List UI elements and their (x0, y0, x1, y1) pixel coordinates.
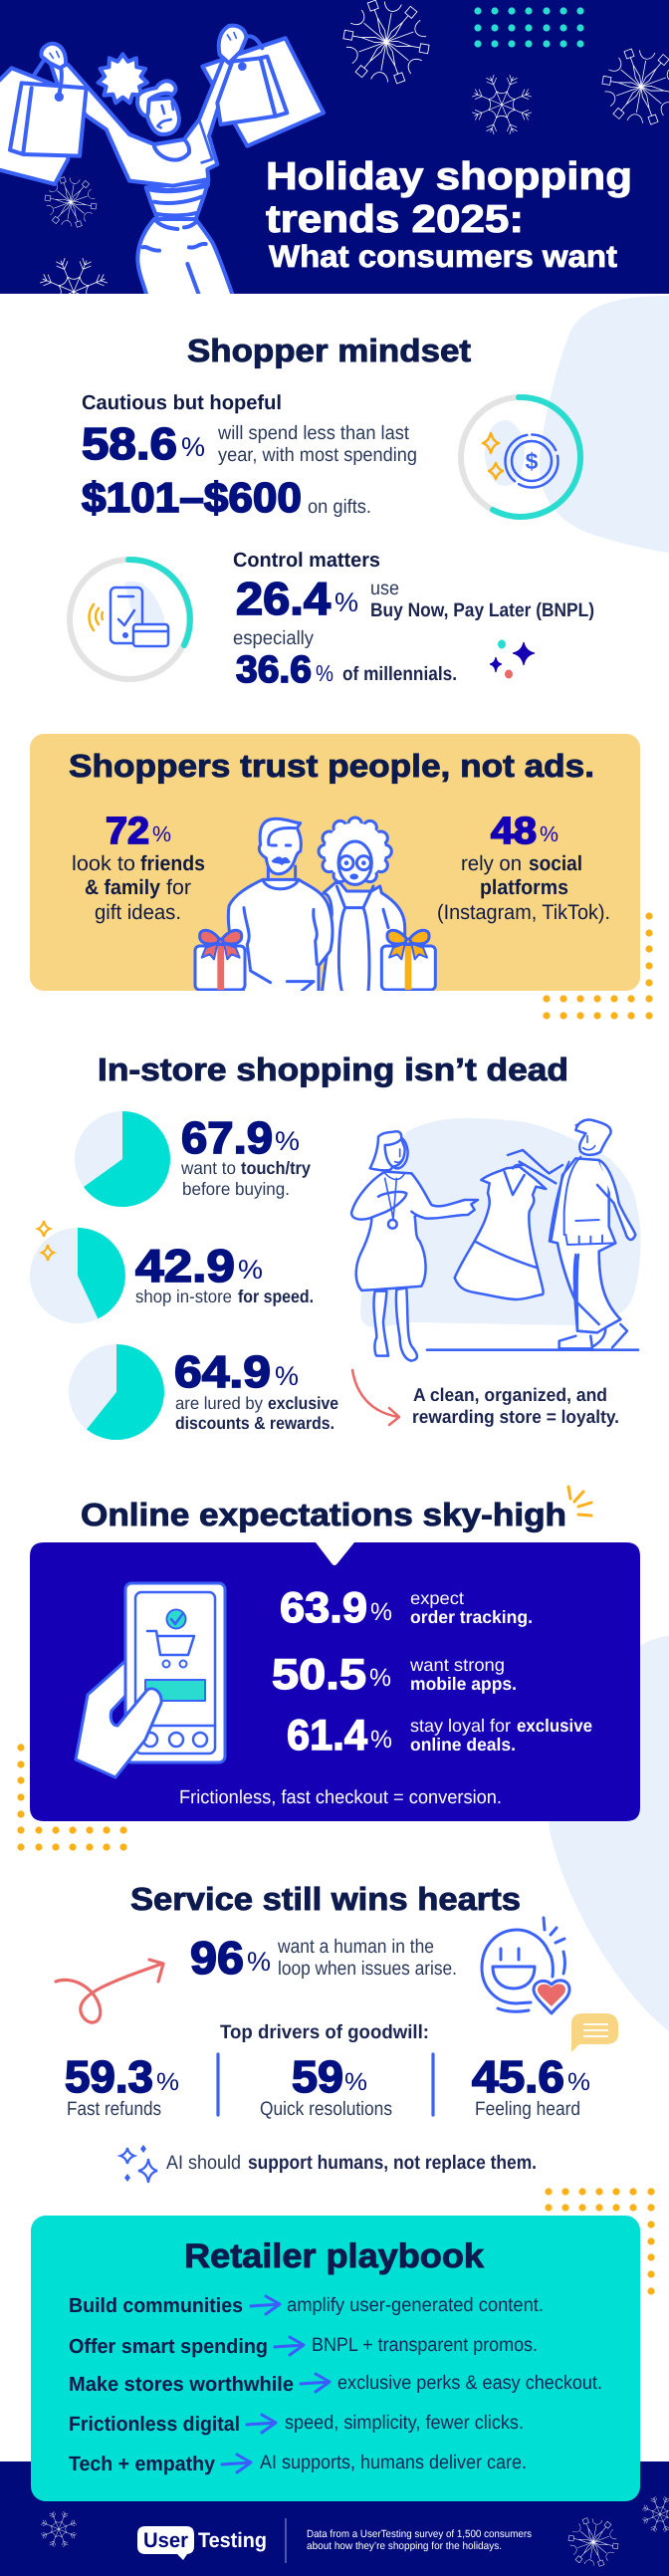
stat: 64.9: are lured by (175, 1393, 263, 1413)
snowflake (642, 2496, 669, 2532)
stat: 50.5 (272, 1651, 517, 1699)
stat: 42.9: for speed. (238, 1287, 314, 1306)
stat description: Buy Now, Pay Later (BNPL) (370, 599, 594, 621)
stat: 61.4: 61.4 (287, 1712, 367, 1759)
dot grid (474, 7, 584, 48)
snowflake (470, 73, 534, 136)
subheading: Top drivers of goodwill: (220, 2021, 429, 2043)
dot pattern: orange corner (543, 912, 653, 1020)
illustration: couple with gifts (195, 818, 435, 993)
stat: 96 percent: % (247, 1947, 271, 1977)
pie chart: 67.9 (75, 1111, 170, 1207)
stat: 72 percent (72, 811, 205, 924)
stat: 96 percent: loop when issues arise. (278, 1958, 457, 1980)
stat: 72 percent: friends (140, 852, 205, 875)
stat: 64.9: discounts & rewards. (175, 1413, 334, 1433)
callout text: rewarding store = loyalty. (412, 1406, 619, 1427)
row: tech plus empathy: AI supports, humans deliver care. (260, 2452, 527, 2473)
stat: fast refunds: % (156, 2068, 179, 2096)
stat: 36.6: 36.6 (236, 649, 312, 691)
ring chart with coin icon (461, 397, 580, 517)
stat: 61.4: % (370, 1726, 392, 1754)
stat: 42.9: shop in-store (135, 1287, 232, 1306)
dot pattern: orange left (17, 1744, 127, 1851)
stat: 63.9: expect (410, 1588, 464, 1608)
stat: 26.4: % (334, 587, 358, 617)
stat: 48 percent: (Instagram, TikTok). (437, 901, 610, 924)
heading: Service still wins hearts (130, 1881, 521, 1917)
source note: Data from a UserTesting survey of 1,500 consumers (307, 2528, 532, 2540)
stat: 26.4: 26.4 (236, 573, 331, 624)
stat: 64.9: 64.9 (174, 1346, 271, 1397)
stat: 61.4 (287, 1712, 592, 1759)
icon: sun rays (568, 1487, 591, 1516)
callout text: A clean, organized, and (413, 1384, 607, 1405)
stat: 63.9 (280, 1584, 533, 1632)
stat: 67.9: touch/try (241, 1158, 311, 1178)
stat: 36.6: of millennials. (342, 663, 457, 685)
stat: 72 percent: & family (85, 876, 160, 899)
stat: 63.9: 63.9 (280, 1584, 367, 1632)
icon: sparkle decoration (490, 639, 535, 679)
stat: 58.6: % (181, 432, 205, 462)
row: build communities: Build communities (69, 2294, 243, 2317)
icon: speech bubble (571, 2013, 618, 2052)
stat: 36.6: % (316, 660, 334, 686)
stat: quick resolutions (260, 2051, 392, 2120)
stat: feeling heard: Feeling heard (475, 2098, 580, 2120)
stat: 50.5: 50.5 (272, 1651, 366, 1699)
row: frictionless digital (69, 2412, 524, 2436)
title: Holiday shopping (266, 155, 632, 198)
stat: 96 percent: want a human in the (277, 1936, 434, 1958)
subheading: Cautious but hopeful (82, 391, 282, 414)
row: build communities: amplify user-generated content. (287, 2294, 544, 2316)
stat: spending range: $101–$600 (82, 474, 302, 521)
stat: 50.5: want strong (409, 1655, 505, 1675)
subheading: Control matters (233, 549, 380, 572)
title: trends 2025: (266, 198, 524, 241)
callout text: AI should (166, 2152, 241, 2174)
icon: sparkles (38, 1221, 54, 1261)
section: service still wins hearts (56, 1881, 618, 2183)
snowflake (343, 0, 429, 84)
stat: 96 percent: 96 (190, 1932, 244, 1984)
stat: 48 percent: social (529, 852, 582, 875)
stat: 42.9 (135, 1240, 314, 1306)
footer banner (0, 2461, 669, 2576)
stat: 50.5: % (369, 1664, 391, 1692)
logo (137, 2526, 267, 2560)
stat: 67.9: want to (180, 1158, 236, 1178)
icon: blue sparkles (120, 2145, 157, 2183)
stat: 72 percent: % (152, 821, 171, 846)
heading: Shopper mindset (187, 333, 471, 368)
stat: 67.9: before buying. (182, 1179, 290, 1199)
stat: 67.9: 67.9 (181, 1112, 273, 1163)
stat: 42.9: 42.9 (135, 1240, 235, 1291)
row: make stores worthwhile (69, 2372, 602, 2396)
row: offer smart spending: BNPL + transparent promos. (312, 2334, 538, 2356)
heading: Shoppers trust people, not ads. (69, 748, 594, 784)
heading: In-store shopping isn’t dead (98, 1052, 568, 1087)
illustration: woman with shopping bags (0, 26, 324, 299)
panel: shoppers trust people (30, 734, 640, 993)
stat: 36.6 (236, 649, 457, 691)
stat: 63.9: order tracking. (410, 1607, 533, 1627)
stat description (217, 422, 417, 466)
pie chart: 42.9 (30, 1228, 125, 1323)
section: in-store shopping (30, 1052, 641, 1440)
row: build communities (69, 2294, 544, 2317)
stat: 72 percent: look to (72, 852, 135, 875)
row: frictionless digital: speed, simplicity, fewer clicks. (285, 2412, 524, 2434)
row: tech plus empathy (69, 2452, 527, 2475)
source note (307, 2528, 532, 2552)
header banner (0, 0, 669, 294)
logo: User (143, 2529, 188, 2552)
row: make stores worthwhile: Make stores worthwhile (69, 2373, 294, 2396)
stat: feeling heard: 45.6 (472, 2051, 564, 2102)
ring chart with phone icon (70, 560, 190, 679)
row: offer smart spending (69, 2334, 538, 2358)
stat: 48 percent (437, 811, 610, 924)
arrow: red curved (352, 1370, 399, 1425)
panel: online stats (30, 1542, 640, 1821)
stat: 64.9: % (275, 1361, 299, 1391)
stat: 96 percent (190, 1932, 457, 1984)
stat: feeling heard: % (567, 2068, 590, 2096)
stat: quick resolutions: Quick resolutions (260, 2098, 392, 2120)
stat: 61.4: exclusive (517, 1716, 592, 1736)
logo: Testing (198, 2529, 267, 2552)
stat: 48 percent: platforms (480, 876, 568, 899)
row: offer smart spending: Offer smart spending (69, 2335, 268, 2358)
stat: 61.4: stay loyal for (410, 1716, 511, 1736)
callout text: support humans, not replace them. (248, 2152, 537, 2174)
snowflake (40, 2510, 78, 2548)
illustration: phone in hand (76, 1583, 225, 1777)
source note: about how they’re shopping for the holidays. (307, 2540, 502, 2552)
stat: 61.4: online deals. (410, 1735, 516, 1755)
ring chart with coin icon: $ (526, 448, 539, 474)
stat: 50.5: mobile apps. (410, 1674, 517, 1694)
background blob: upper right (540, 296, 669, 553)
snowflake (602, 49, 669, 124)
heading: Online expectations sky-high (81, 1497, 566, 1532)
stat description: year, with most spending (218, 444, 417, 466)
stat: 48 percent: % (540, 821, 558, 846)
row: frictionless digital: Frictionless digital (69, 2413, 240, 2436)
stat: feeling heard (472, 2051, 590, 2120)
stat: 72 percent: for (166, 876, 191, 899)
snowflake (45, 177, 97, 227)
stat: 72 percent: 72 (106, 811, 149, 852)
title (266, 155, 632, 274)
row: make stores worthwhile: exclusive perks & easy checkout. (337, 2372, 602, 2394)
section: online expectations (30, 1487, 640, 1821)
stat: 67.9: % (275, 1126, 300, 1156)
stat: fast refunds: 59.3 (65, 2051, 153, 2102)
stat: 67.9 (180, 1112, 311, 1199)
panel: retailer playbook (31, 2216, 640, 2501)
stat: 42.9: % (238, 1255, 263, 1285)
stat: 48 percent: 48 (491, 811, 537, 852)
stat: 64.9: exclusive (268, 1393, 338, 1413)
illustration: shoppers and dress (351, 1118, 641, 1361)
stat description: will spend less than last (217, 422, 410, 444)
callout text (412, 1384, 619, 1427)
stat: 58.6: 58.6 (82, 418, 177, 469)
stat: quick resolutions: 59 (292, 2051, 343, 2102)
stat description: use (370, 578, 399, 599)
background blob: lower right (549, 1636, 669, 2031)
snowflake clipped (40, 258, 108, 294)
stat: 72 percent: gift ideas. (95, 901, 181, 924)
dot pattern: orange upper right of playbook (545, 2188, 655, 2295)
section: shopper mindset (70, 333, 594, 691)
stat: 48 percent: rely on (461, 852, 522, 875)
stat description (233, 578, 594, 649)
row: tech plus empathy: Tech + empathy (69, 2453, 216, 2475)
title: What consumers want (269, 239, 617, 274)
heading: Retailer playbook (184, 2237, 484, 2275)
stat: 63.9: % (370, 1598, 392, 1626)
snowflake (568, 2518, 618, 2566)
caption: Frictionless, fast checkout = conversion. (179, 1787, 502, 1808)
icon: smiley with heart (482, 1918, 569, 2013)
pie chart: 64.9 (69, 1344, 164, 1440)
arrow: red loop (56, 1960, 163, 2022)
stat: spending range: on gifts. (308, 496, 371, 518)
stat: fast refunds: Fast refunds (67, 2098, 161, 2120)
stat: quick resolutions: % (344, 2068, 367, 2096)
stat description: especially (233, 627, 314, 649)
stat: 64.9 (174, 1346, 338, 1433)
stat: fast refunds (65, 2051, 179, 2120)
